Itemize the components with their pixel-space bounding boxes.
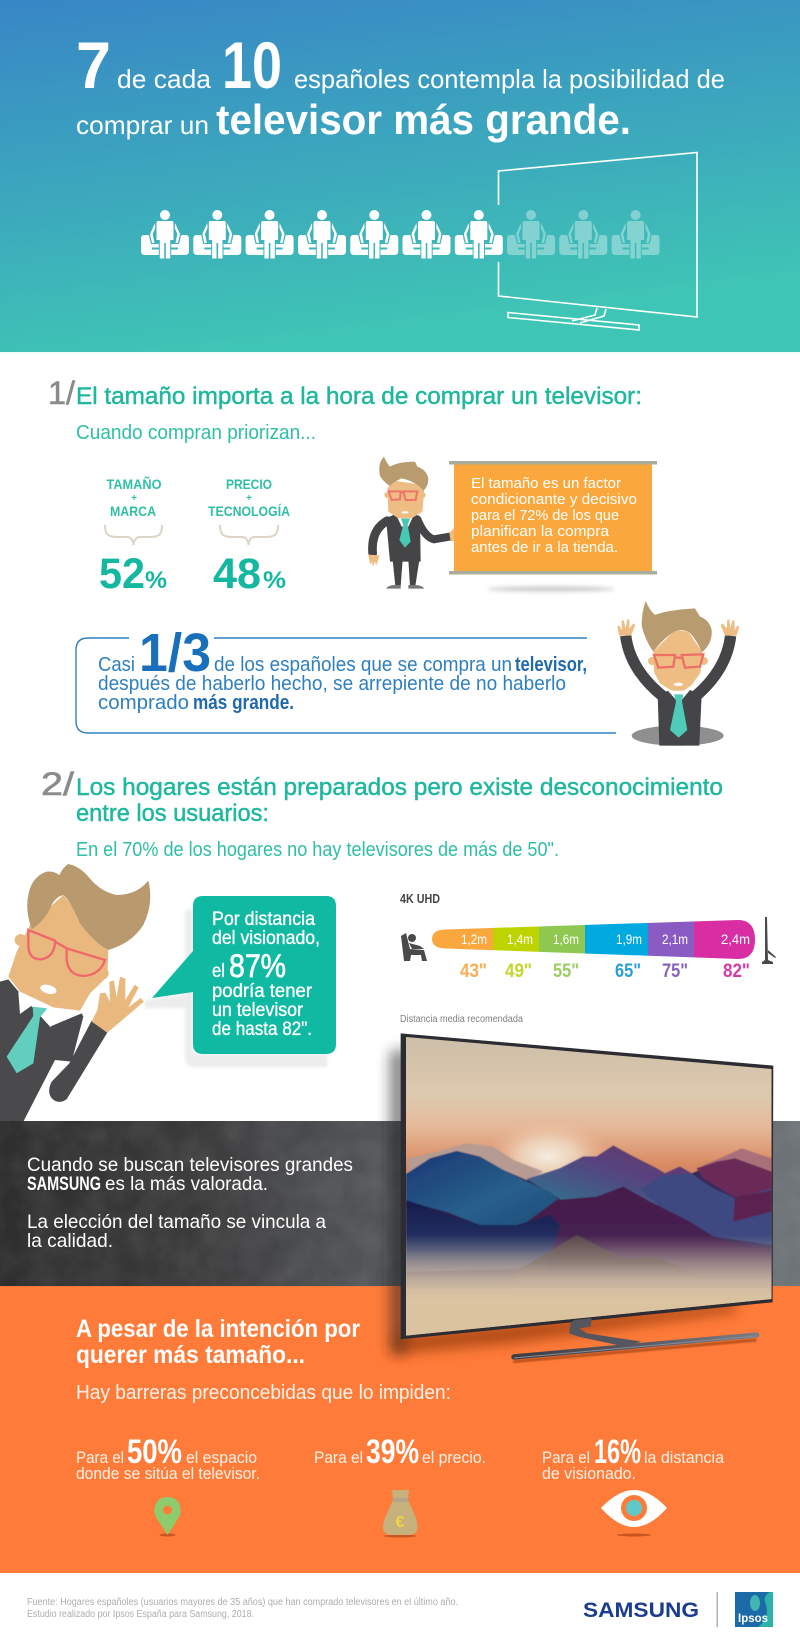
stat: 50% space: donde se sitúa el televisor. xyxy=(76,1465,260,1483)
stat: size and brand 52%: MARCA xyxy=(110,503,156,519)
callout: speech bubble 87%: del visionado, xyxy=(212,928,320,949)
stat: size and brand 52%: 52 xyxy=(99,550,145,598)
stat: size and brand 52%: % xyxy=(145,567,167,594)
stat: 16% viewing distance: la distancia xyxy=(644,1449,725,1467)
chart: 4K UHD viewing distance: 65" xyxy=(615,961,641,982)
stat: 16% viewing distance: de visionado. xyxy=(542,1465,636,1483)
chart: 4K UHD viewing distance: 75" xyxy=(662,961,688,982)
callout: one third of Spaniards xyxy=(76,623,616,733)
text: Samsung most valued: La elección del tamaño se vincula a xyxy=(27,1211,326,1233)
chart: 4K UHD viewing distance: 49" xyxy=(505,961,532,982)
chart: 4K UHD viewing distance: 1,9m xyxy=(616,932,642,947)
callout: speech bubble 87%: 87% xyxy=(229,948,286,984)
caption: recommended distance: Distancia media recomendada xyxy=(400,1014,523,1025)
stat: 39% price: Para el xyxy=(314,1449,363,1467)
stat: 39% price: el precio. xyxy=(422,1449,486,1467)
chart: 4K UHD viewing distance: 2,1m xyxy=(662,932,688,947)
text: Samsung most valued: la calidad. xyxy=(27,1230,113,1252)
callout: orange board: condicionante y decisivo xyxy=(471,492,637,508)
stat: price and technology 48%: PRECIO xyxy=(226,476,272,492)
stat: price and technology 48% xyxy=(208,476,290,598)
callout: one third of Spaniards: Casi xyxy=(98,654,135,676)
icon: money bag: € xyxy=(396,1514,405,1531)
illustration: man with raised arms xyxy=(617,601,739,746)
illustration: man whispering xyxy=(0,864,150,1122)
chart: 4K UHD viewing distance: 82" xyxy=(723,961,750,982)
icon: money bag xyxy=(383,1490,418,1538)
stat: 50% space xyxy=(76,1433,260,1483)
footer source note: Estudio realizado por Ipsos España para Samsung, 2018. xyxy=(27,1609,254,1620)
icon: location pin xyxy=(154,1497,181,1536)
stat: 50% space: el espacio xyxy=(186,1449,257,1467)
title: 7 de cada 10: comprar un xyxy=(76,110,209,140)
callout: orange board: El tamaño es un factor xyxy=(471,476,621,492)
stat: 16% viewing distance: Para el xyxy=(542,1449,590,1467)
icon: eye xyxy=(601,1490,667,1536)
footer source note: Fuente: Hogares españoles (usuarios mayores de 35 años) que han comprado televisores en el último año. xyxy=(27,1597,458,1608)
icon: armchair xyxy=(401,933,427,961)
chart: 4K UHD viewing distance: 1,6m xyxy=(553,932,579,947)
chart: 4K UHD viewing distance: 43" xyxy=(460,961,487,982)
stat: price and technology 48%: 48 xyxy=(213,550,261,598)
stat: size and brand 52%: TAMAÑO xyxy=(106,475,162,492)
section 2 heading xyxy=(41,766,723,827)
illustration: man presenting xyxy=(368,457,455,589)
title: 7 de cada 10: de cada xyxy=(117,64,212,94)
section 1 heading: El tamaño importa a la hora de comprar un televisor: xyxy=(76,383,642,410)
logo: Samsung: SAMSUNG xyxy=(583,1599,699,1622)
stat: price and technology 48%: + xyxy=(246,493,252,504)
text: Samsung most valued: Cuando se buscan televisores grandes xyxy=(27,1154,353,1176)
callout: orange board xyxy=(449,461,657,592)
heading: despite the intention xyxy=(76,1315,360,1369)
section 1 heading: 1/ xyxy=(48,375,75,411)
stat: 16% viewing distance xyxy=(542,1433,725,1483)
callout: one third of Spaniards: más grande. xyxy=(193,692,294,714)
heading: despite the intention: querer más tamaño... xyxy=(76,1341,305,1369)
stat: 50% space: 50% xyxy=(127,1433,182,1471)
illustration: TV outline xyxy=(498,152,697,330)
section 2 heading: 2/ xyxy=(41,766,74,802)
callout: speech bubble 87%: de hasta 82". xyxy=(212,1019,312,1040)
heading: despite the intention: A pesar de la intención por xyxy=(76,1315,360,1343)
chart: 4K UHD viewing distance: 2,4m xyxy=(721,932,750,947)
callout: one third of Spaniards: 1/3 xyxy=(139,623,211,683)
chart: 4K UHD viewing distance: 55" xyxy=(553,961,579,982)
callout: speech bubble 87% xyxy=(145,896,336,1067)
chart: 4K UHD viewing distance: 1,4m xyxy=(507,932,533,947)
subheading: 70% of homes: En el 70% de los hogares no hay televisores de más de 50". xyxy=(76,839,559,861)
title: 7 de cada 10: 7 xyxy=(76,28,111,102)
panel: orange band xyxy=(0,1286,800,1573)
stat: size and brand 52%: + xyxy=(131,493,137,504)
title: 7 de cada 10 xyxy=(76,28,725,143)
callout: one third of Spaniards: televisor, xyxy=(515,654,587,676)
callout: speech bubble 87%: Por distancia xyxy=(212,909,315,930)
stat: 39% price: 39% xyxy=(366,1433,419,1471)
callout: speech bubble 87%: podría tener xyxy=(212,981,313,1002)
icon: TV side view xyxy=(762,917,776,964)
chart: 4K UHD viewing distance: 4K UHD xyxy=(400,892,440,906)
callout: speech bubble 87%: un televisor xyxy=(212,1000,304,1021)
stat: 39% price xyxy=(314,1433,486,1471)
callout: orange board: antes de ir a la tienda. xyxy=(471,540,618,556)
text: Samsung most valued xyxy=(27,1154,353,1252)
section 2 heading: entre los usuarios: xyxy=(76,800,269,827)
subheading: priorities: Cuando compran priorizan... xyxy=(76,422,316,444)
panel: dark band xyxy=(0,1121,800,1286)
section 2 heading: Los hogares están preparados pero existe desconocimiento xyxy=(76,774,723,801)
callout: orange board: para el 72% de los que xyxy=(471,508,619,524)
icons: 7 of 10 seated people xyxy=(141,210,503,258)
callout: one third of Spaniards: de los españoles que se compra un xyxy=(214,654,512,676)
text: Samsung most valued: SAMSUNG xyxy=(27,1173,101,1195)
stat: price and technology 48%: TECNOLOGÍA xyxy=(208,503,290,519)
text: Samsung most valued: es la más valorada. xyxy=(105,1173,268,1195)
logo: Ipsos xyxy=(716,1592,773,1627)
stat: price and technology 48%: % xyxy=(263,567,286,594)
title: 7 de cada 10: televisor más grande. xyxy=(216,96,631,143)
stat: size and brand 52% xyxy=(99,475,167,598)
panel: header gradient xyxy=(0,0,800,354)
image: large television with mountain landscape xyxy=(390,1033,773,1363)
stat: 50% space: Para el xyxy=(76,1449,124,1467)
subheading: barriers: Hay barreras preconcebidas que lo impiden: xyxy=(76,1382,451,1404)
callout: speech bubble 87%: el xyxy=(212,961,225,982)
callout: one third of Spaniards: comprado xyxy=(98,692,189,714)
title: 7 de cada 10: 10 xyxy=(222,28,282,102)
callout: one third of Spaniards: después de haberlo hecho, se arrepiente de no haberlo xyxy=(98,673,566,695)
icons: 3 faded seated people xyxy=(507,210,660,258)
chart: 4K UHD viewing distance: 1,2m xyxy=(461,932,487,947)
title: 7 de cada 10: españoles contempla la posibilidad de xyxy=(294,64,725,94)
callout: orange board: planifican la compra xyxy=(471,524,610,540)
chart: 4K UHD viewing distance xyxy=(400,892,776,982)
stat: 16% viewing distance: 16% xyxy=(594,1433,641,1471)
logo: Ipsos: Ipsos xyxy=(738,1611,768,1625)
footer source note xyxy=(27,1597,458,1620)
